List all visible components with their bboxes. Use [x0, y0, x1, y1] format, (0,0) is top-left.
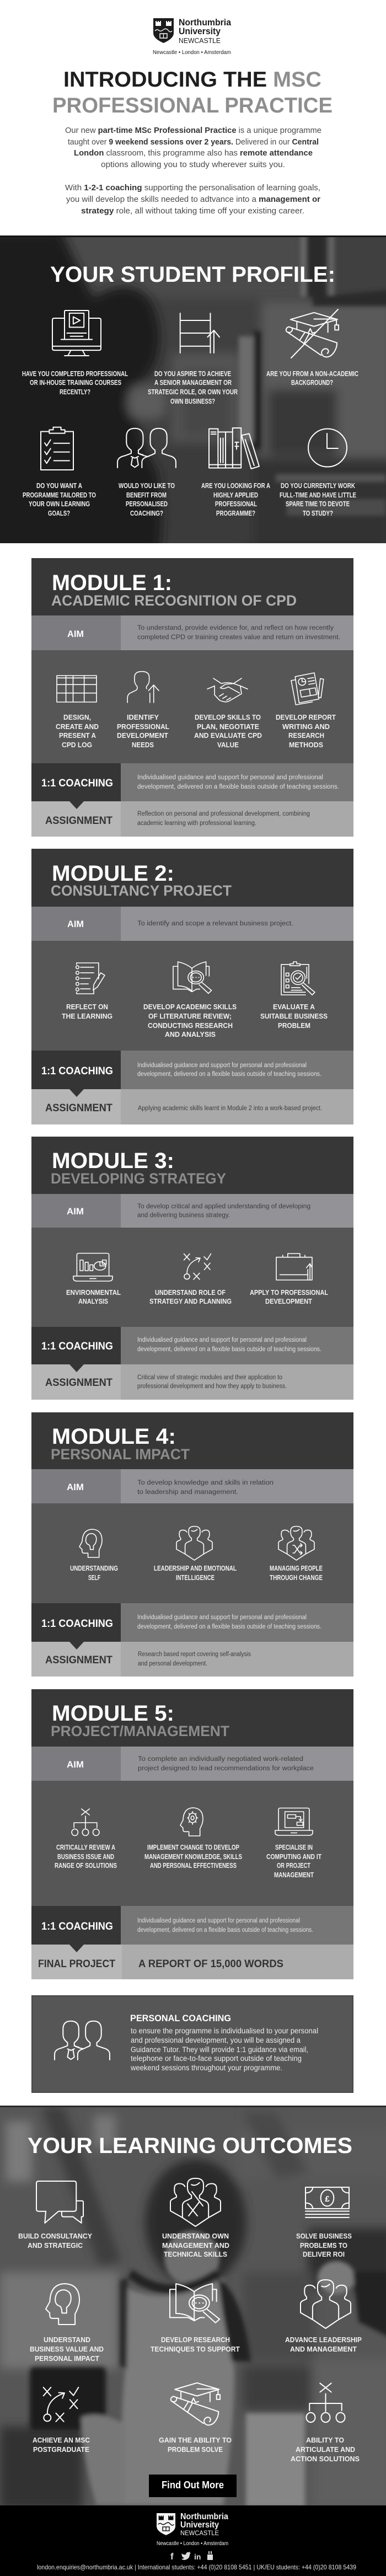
module 1 assignment: Reflection on personal and professional development, combining: [137, 811, 310, 817]
question text row 2: TO STUDY?: [303, 510, 333, 517]
module 3 coaching: 1:1 COACHING: [41, 1341, 113, 1352]
outcomes text row 2: DEVELOP RESEARCH: [161, 2336, 230, 2344]
question text row 1: [22, 370, 358, 405]
module 5 final project: [31, 1945, 353, 1979]
module 4 coaching: 1:1 COACHING: [41, 1618, 113, 1630]
module 4 assignment: ASSIGNMENT: [45, 1654, 112, 1666]
module 4 outcomes: MANAGING PEOPLE: [270, 1565, 323, 1572]
module 4 assignment: Research based report covering self-analysis: [138, 1651, 251, 1658]
icon: table: [57, 676, 96, 702]
intro text: London classroom, this programme also has remote attendance: [74, 148, 313, 158]
intro text: strategy role, all without taking time off your existing career.: [81, 206, 304, 216]
icon: books: [209, 428, 259, 469]
module 3 aim: To develop critical and applied understanding of developing: [137, 1203, 310, 1210]
module 2 assignment: Applying academic skills learnt in Module 2 into a work-based project.: [138, 1105, 322, 1112]
icon: monitor with video course: [52, 310, 101, 356]
outcomes text row 1: UNDERSTAND OWN: [162, 2232, 229, 2240]
question text row 2: WOULD YOU LIKE TO: [119, 482, 175, 490]
title: PROFESSIONAL PRACTICE: [52, 94, 333, 117]
module 1 outcomes: DESIGN,: [63, 714, 91, 721]
question text row 2: [23, 482, 356, 517]
intro text: [65, 126, 321, 216]
logo wordmark: University: [179, 26, 221, 36]
social icons: in: [194, 2552, 201, 2561]
icon: head with brain: [79, 1529, 102, 1557]
icon: clipboard with magnifier: [281, 962, 315, 995]
module 4 aim: AIM: [67, 1482, 84, 1492]
module 2 aim: [31, 907, 353, 941]
module 2 aim: AIM: [67, 919, 84, 929]
module 4 coaching: Individualised guidance and support for personal and professional: [137, 1614, 307, 1621]
personal coaching text: telephone or face-to-face support outside of teaching: [131, 2054, 302, 2063]
intro text: With 1-2-1 coaching supporting the personalisation of learning goals,: [65, 183, 320, 192]
panel: module 3: [31, 1137, 353, 1400]
personal coaching text: weekend sessions throughout your programme.: [130, 2064, 282, 2072]
module 5 outcomes: IMPLEMENT CHANGE TO DEVELOP: [147, 1844, 239, 1851]
logo wordmark: [153, 17, 232, 56]
module 1 coaching: Individualised guidance and support for personal and professional: [137, 774, 323, 781]
outcomes text row 3: GAIN THE ABILITY TO: [159, 2436, 232, 2444]
module 5 aim: [31, 1747, 353, 1781]
module 1 assignment: academic learning with professional learning.: [137, 820, 256, 827]
module 4 assignment: and personal development.: [138, 1661, 207, 1667]
module 2 outcomes: SUITABLE BUSINESS: [260, 1013, 328, 1020]
module 2 outcomes: OF LITERATURE REVIEW;: [148, 1013, 232, 1020]
module 4 header: PERSONAL IMPACT: [51, 1446, 190, 1463]
module 2 header: [31, 849, 353, 907]
outcomes text row 1: BUILD CONSULTANCY: [18, 2232, 93, 2240]
module 1 assignment: [31, 801, 353, 837]
icon: graduation cap crossed out: [286, 309, 339, 358]
icon: graduation cap and diploma: [171, 2383, 220, 2425]
module 2 outcomes: EVALUATE A: [273, 1003, 315, 1011]
module 1 outcomes: VALUE: [217, 741, 239, 749]
footer wordmark: [157, 2512, 228, 2547]
module 4 aim: To develop knowledge and skills in relation: [137, 1480, 274, 1486]
footer shield: [157, 2513, 175, 2535]
intro text: options allowing you to study wherever suits you.: [101, 160, 285, 169]
icon: book with magnifier: [173, 962, 212, 993]
outcomes text row 1: PROBLEMS TO: [300, 2242, 347, 2250]
module 1 outcomes: NEEDS: [132, 741, 154, 749]
module 5 aim: To complete an individually negotiated work-related: [138, 1756, 303, 1763]
question text row 2: PERSONALISED: [126, 500, 168, 508]
question text row 2: YOUR OWN LEARNING: [29, 500, 90, 508]
panel: module 4: [31, 1412, 353, 1677]
outcomes text row 3: ABILITY TO: [306, 2436, 344, 2444]
panel: student profile: [0, 232, 386, 551]
module 1 assignment: ASSIGNMENT: [45, 815, 112, 827]
module 1 coaching: [31, 763, 353, 801]
module 5 outcomes: RANGE OF SOLUTIONS: [55, 1862, 117, 1870]
module 2 outcomes: DEVELOP ACADEMIC SKILLS: [143, 1003, 237, 1011]
module 3 coaching: Individualised guidance and support for personal and professional: [137, 1337, 307, 1343]
panel: module 1: [31, 558, 353, 837]
question text row 2: PROGRAMME?: [216, 510, 255, 517]
module 5 coaching: Individualised guidance and support for personal and professional: [137, 1918, 300, 1924]
module 2 header: MODULE 2:: [52, 861, 174, 886]
outcomes text row 3: ACTION SOLUTIONS: [291, 2455, 360, 2463]
outcomes text row 3: ARTICULATE AND: [296, 2446, 355, 2454]
icon: banknote with pound: £: [325, 2194, 330, 2204]
icon: speech bubbles: [36, 2181, 83, 2223]
header logo: [153, 17, 232, 56]
panel: module 5: [31, 1689, 353, 1979]
module 4 header: MODULE 4:: [52, 1424, 176, 1449]
module 1 coaching: development, delivered on a flexible basis outside of teaching sessions.: [137, 784, 339, 790]
outcomes text row 1: MANAGEMENT AND: [162, 2242, 229, 2250]
outcomes text row 1: AND STRATEGIC: [28, 2242, 83, 2250]
question text row 1: BACKGROUND?: [291, 379, 333, 387]
module 3 outcomes: DEVELOPMENT: [265, 1298, 312, 1305]
logo wordmark: Newcastle • London • Amsterdam: [153, 49, 231, 56]
question text row 1: OWN BUSINESS?: [170, 398, 215, 405]
module 5 outcomes: AND PERSONAL EFFECTIVENESS: [150, 1862, 237, 1870]
question text row 1: OR IN-HOUSE TRAINING COURSES: [30, 379, 121, 387]
personal coaching heading: PERSONAL COACHING: [130, 2013, 231, 2023]
icon: two people: [117, 429, 176, 468]
personal coaching text: Guidance Tutor. They will provide 1:1 guidance via email,: [131, 2045, 308, 2054]
question text row 2: HIGHLY APPLIED: [213, 491, 258, 499]
module 1 outcomes: [56, 714, 336, 749]
module 3 outcomes: ANALYSIS: [78, 1298, 108, 1305]
module 5 outcomes: MANAGEMENT: [274, 1871, 314, 1879]
module 2 coaching: Individualised guidance and support for personal and professional: [137, 1062, 307, 1069]
module 2 coaching: development, delivered on a flexible basis outside of teaching sessions.: [137, 1071, 321, 1078]
icon: head with brain: [46, 2284, 79, 2325]
question text row 2: GOALS?: [48, 510, 70, 517]
outcomes text row 2: [30, 2336, 362, 2363]
module 4 outcomes: [70, 1565, 323, 1582]
module 3 assignment: [31, 1364, 353, 1400]
module 5 coaching: [31, 1906, 353, 1945]
module 3 assignment: professional development and how they apply to business.: [137, 1383, 287, 1390]
outcomes text row 1: DELIVER ROI: [303, 2251, 345, 2258]
module 3 header: DEVELOPING STRATEGY: [51, 1170, 226, 1187]
icon: head with gear: [180, 1808, 203, 1836]
module 3 outcomes: [66, 1289, 328, 1305]
module 2 outcomes: CONDUCTING RESEARCH: [148, 1022, 233, 1030]
question text row 2: ARE YOU LOOKING FOR A: [201, 482, 270, 490]
module 5 coaching: 1:1 COACHING: [41, 1921, 113, 1932]
module 3 aim: AIM: [67, 1206, 84, 1217]
module 1 outcomes: PLAN, NEGOTIATE: [197, 723, 259, 731]
panel: module 2: [31, 849, 353, 1124]
module 1 outcomes: DEVELOP REPORT: [276, 714, 336, 721]
outcomes text row 2: PERSONAL IMPACT: [35, 2355, 99, 2363]
question text row 2: PROGRAMME TAILORED TO: [23, 491, 96, 499]
module 2 assignment: ASSIGNMENT: [45, 1102, 112, 1114]
module 3 header: [31, 1137, 353, 1194]
heading: YOUR STUDENT PROFILE:: [50, 263, 335, 287]
title: [52, 68, 333, 117]
icon: group with change arrows: [278, 1527, 314, 1560]
outcomes text row 3: PROBLEM SOLVE: [168, 2446, 223, 2454]
question text row 2: COACHING?: [130, 510, 163, 517]
module 1 outcomes: CPD LOG: [62, 741, 92, 749]
module 1 outcomes: CREATE AND: [56, 723, 99, 731]
question text row 2: DO YOU CURRENTLY WORK: [281, 482, 355, 490]
icon: decision tree: [306, 2383, 345, 2422]
footer wordmark: Northumbria: [180, 2512, 228, 2521]
module 4 coaching: [31, 1603, 353, 1642]
question text row 1: ARE YOU FROM A NON-ACADEMIC: [266, 370, 358, 378]
module 2 outcomes: REFLECT ON: [66, 1003, 108, 1011]
outcomes text row 1: [18, 2232, 352, 2258]
module 4 coaching: development, delivered on a flexible basis outside of teaching sessions.: [137, 1624, 321, 1630]
module 5 header: MODULE 5:: [52, 1701, 174, 1726]
question text row 1: STRATEGIC ROLE, OR OWN YOUR: [148, 388, 238, 396]
outcomes text row 2: TECHNIQUES TO SUPPORT: [151, 2345, 240, 2353]
module 4 assignment: [31, 1642, 353, 1677]
module 3 body: [31, 1228, 353, 1327]
module 4 aim: to leadership and management.: [137, 1489, 238, 1496]
learning outcomes photo background: [0, 2106, 386, 2509]
module 2 body: [31, 941, 353, 1051]
icon: clock: [308, 429, 347, 467]
module 3 aim: [31, 1194, 353, 1228]
social icons: f: [170, 2551, 174, 2562]
module 3 outcomes: STRATEGY AND PLANNING: [149, 1298, 232, 1305]
module 1 outcomes: PROFESSIONAL: [117, 723, 169, 731]
question text row 2: SPARE TIME TO DEVOTE: [286, 500, 350, 508]
module 3 outcomes: APPLY TO PROFESSIONAL: [250, 1289, 328, 1297]
footer wordmark: Newcastle • London • Amsterdam: [157, 2541, 228, 2547]
module 3 coaching: development, delivered on a flexible basis outside of teaching sessions.: [137, 1346, 321, 1353]
module 4 body: [31, 1503, 353, 1603]
module 2 outcomes: [62, 1003, 328, 1038]
outcomes text row 3: ACHIEVE AN MSC: [33, 2436, 90, 2444]
module 2 outcomes: THE LEARNING: [62, 1013, 112, 1020]
heading: YOUR LEARNING OUTCOMES: [28, 2134, 352, 2158]
module 5 header: [31, 1689, 353, 1747]
module 5 outcomes: BUSINESS ISSUE AND: [57, 1853, 114, 1861]
intro text: Our new part-time MSc Professional Practice is a unique programme: [65, 126, 321, 135]
question text row 1: A SENIOR MANAGEMENT OR: [154, 379, 232, 387]
personal coaching text: [130, 2027, 318, 2072]
icon: banknote with pound: [305, 2187, 349, 2218]
icon: strategy plays: [44, 2387, 78, 2422]
module 1 outcomes: DEVELOP SKILLS TO: [195, 714, 261, 721]
module 2 outcomes: AND ANALYSIS: [165, 1031, 216, 1038]
icon: briefcase with arrow: [276, 1254, 312, 1280]
module 2 assignment: [31, 1089, 353, 1124]
module 5 aim: AIM: [67, 1759, 84, 1770]
module 3 outcomes: UNDERSTAND ROLE OF: [155, 1289, 226, 1297]
intro text: you will develop the skills needed to adtvance into a management or: [66, 195, 320, 204]
module 2 aim: To identify and scope a relevant business project.: [137, 920, 293, 927]
module 4 outcomes: INTELLIGENCE: [176, 1574, 215, 1582]
module 5 final project: FINAL PROJECT: [38, 1958, 115, 1970]
outcomes text row 1: TECHNICAL SKILLS: [164, 2251, 227, 2258]
outcomes text row 2: UNDERSTAND: [44, 2336, 90, 2344]
student profile photo background: [0, 232, 386, 551]
module 2 coaching: [31, 1051, 353, 1089]
module 5 final project: A REPORT OF 15,000 WORDS: [138, 1958, 283, 1970]
module 1 coaching: 1:1 COACHING: [41, 778, 113, 789]
module 1 outcomes: IDENTIFY: [127, 714, 159, 721]
outcomes text row 2: ADVANCE LEADERSHIP: [285, 2336, 362, 2344]
module 1 outcomes: AND EVALUATE CPD: [194, 732, 262, 740]
module 3 header: MODULE 3:: [52, 1149, 174, 1173]
module 1 body: [31, 650, 353, 763]
module 3 aim: and delivering business strategy.: [137, 1212, 230, 1219]
module 5 outcomes: CRITICALLY REVIEW A: [56, 1844, 115, 1851]
module 1 aim: AIM: [67, 629, 84, 639]
module 3 assignment: ASSIGNMENT: [45, 1377, 112, 1389]
icon: handshake: [207, 678, 248, 702]
logo wordmark: Northumbria: [179, 17, 232, 28]
outcomes text row 2: AND MANAGEMENT: [290, 2345, 357, 2353]
module 5 outcomes: [55, 1844, 321, 1879]
module 5 outcomes: SPECIALISE IN: [275, 1844, 313, 1851]
module 3 coaching: [31, 1327, 353, 1364]
footer wordmark: University: [180, 2520, 219, 2530]
icon: person with arrow: [127, 672, 159, 703]
icon: team with tools: [170, 2178, 221, 2226]
module 4 outcomes: SELF: [88, 1574, 100, 1582]
outcomes text row 3: POSTGRADUATE: [33, 2446, 89, 2454]
module 1 outcomes: RESEARCH: [288, 732, 324, 740]
footer: [0, 2505, 386, 2576]
module 1 outcomes: PRESENT A: [59, 732, 96, 740]
icon: shield: [153, 18, 174, 43]
logo wordmark: NEWCASTLE: [179, 36, 221, 45]
module 1 header: ACADEMIC RECOGNITION OF CPD: [51, 592, 297, 609]
module 1 aim: completed CPD or training creates value and return on investment.: [137, 634, 340, 641]
module 3 assignment: Critical view of strategic modules and their application to: [137, 1374, 282, 1381]
module 2 coaching: 1:1 COACHING: [41, 1065, 113, 1077]
social icons: [170, 2551, 213, 2562]
panel: personal coaching: [32, 1996, 353, 2092]
module 1 aim: [31, 615, 353, 650]
icon: ladder with arrow: [180, 313, 219, 353]
module 4 outcomes: UNDERSTANDING: [70, 1565, 118, 1572]
question text row 2: FULL-TIME AND HAVE LITTLE: [280, 491, 356, 499]
panel: learning outcomes: [0, 2106, 386, 2509]
icon: report: [291, 673, 324, 705]
icon: laptop with charts: [73, 1254, 112, 1281]
module 3 outcomes: ENVIRONMENTAL: [66, 1289, 121, 1297]
module 1 header: [31, 558, 353, 615]
personal coaching text: and professional development, you will be assigned a: [131, 2036, 301, 2044]
outcomes text row 1: SOLVE BUSINESS: [296, 2232, 352, 2240]
question text row 1: DO YOU ASPIRE TO ACHIEVE: [154, 370, 231, 378]
module 5 outcomes: COMPUTING AND IT: [266, 1853, 321, 1861]
icon: strategy plays: [184, 1254, 211, 1279]
module 5 coaching: development, delivered on a flexible basis outside of teaching sessions.: [137, 1927, 313, 1934]
module 5 header: PROJECT/MANAGEMENT: [51, 1723, 229, 1739]
module 2 header: CONSULTANCY PROJECT: [51, 882, 232, 899]
module 4 header: [31, 1412, 353, 1469]
footer wordmark: NEWCASTLE: [180, 2529, 219, 2537]
module 5 outcomes: MANAGEMENT KNOWLEDGE, SKILLS: [144, 1853, 242, 1861]
outcomes text row 3: [33, 2436, 360, 2463]
icon: book with magnifier: [170, 2284, 219, 2323]
question text row 2: PROFESSIONAL: [215, 500, 257, 508]
module 1 outcomes: DEVELOPMENT: [117, 732, 168, 740]
icon: leadership group: [301, 2280, 351, 2328]
personal coaching text: to ensure the programme is individualised to your personal: [131, 2027, 318, 2035]
module 5 body: [31, 1781, 353, 1906]
module 4 outcomes: THROUGH CHANGE: [270, 1574, 323, 1582]
module 1 outcomes: METHODS: [289, 741, 323, 749]
icon: two people: [55, 2021, 110, 2060]
icon: notepad: [76, 963, 105, 994]
icon: leadership group: [176, 1527, 212, 1560]
question text row 1: RECENTLY?: [60, 388, 90, 396]
title: INTRODUCING THE MSC: [63, 68, 321, 92]
module 4 outcomes: LEADERSHIP AND EMOTIONAL: [154, 1565, 237, 1572]
icon: laptop with flowchart: [275, 1808, 313, 1835]
module 2 outcomes: PROBLEM: [278, 1022, 310, 1030]
button: find out more: [149, 2475, 237, 2497]
module 1 header: MODULE 1:: [52, 571, 172, 595]
module 1 aim: To understand, provide evidence for, and reflect on how recently: [137, 625, 334, 631]
question text row 2: DO YOU WANT A: [36, 482, 82, 490]
icon: decision tree: [72, 1809, 99, 1835]
outcomes text row 2: BUSINESS VALUE AND: [30, 2345, 104, 2353]
question text row 1: HAVE YOU COMPLETED PROFESSIONAL: [22, 370, 128, 378]
icon: checklist clipboard: [41, 427, 73, 470]
question text row 2: BENEFIT FROM: [126, 491, 167, 499]
intro text: taught over 9 weekend sessions over 2 years. Delivered in our Central: [68, 137, 319, 147]
button: find out more: Find Out More: [162, 2479, 224, 2491]
module 5 aim: project designed to lead recommendations for workplace: [138, 1765, 314, 1772]
module 1 outcomes: WRITING AND: [282, 723, 330, 731]
module 4 aim: [31, 1469, 353, 1503]
module 5 outcomes: OR PROJECT: [277, 1862, 310, 1870]
